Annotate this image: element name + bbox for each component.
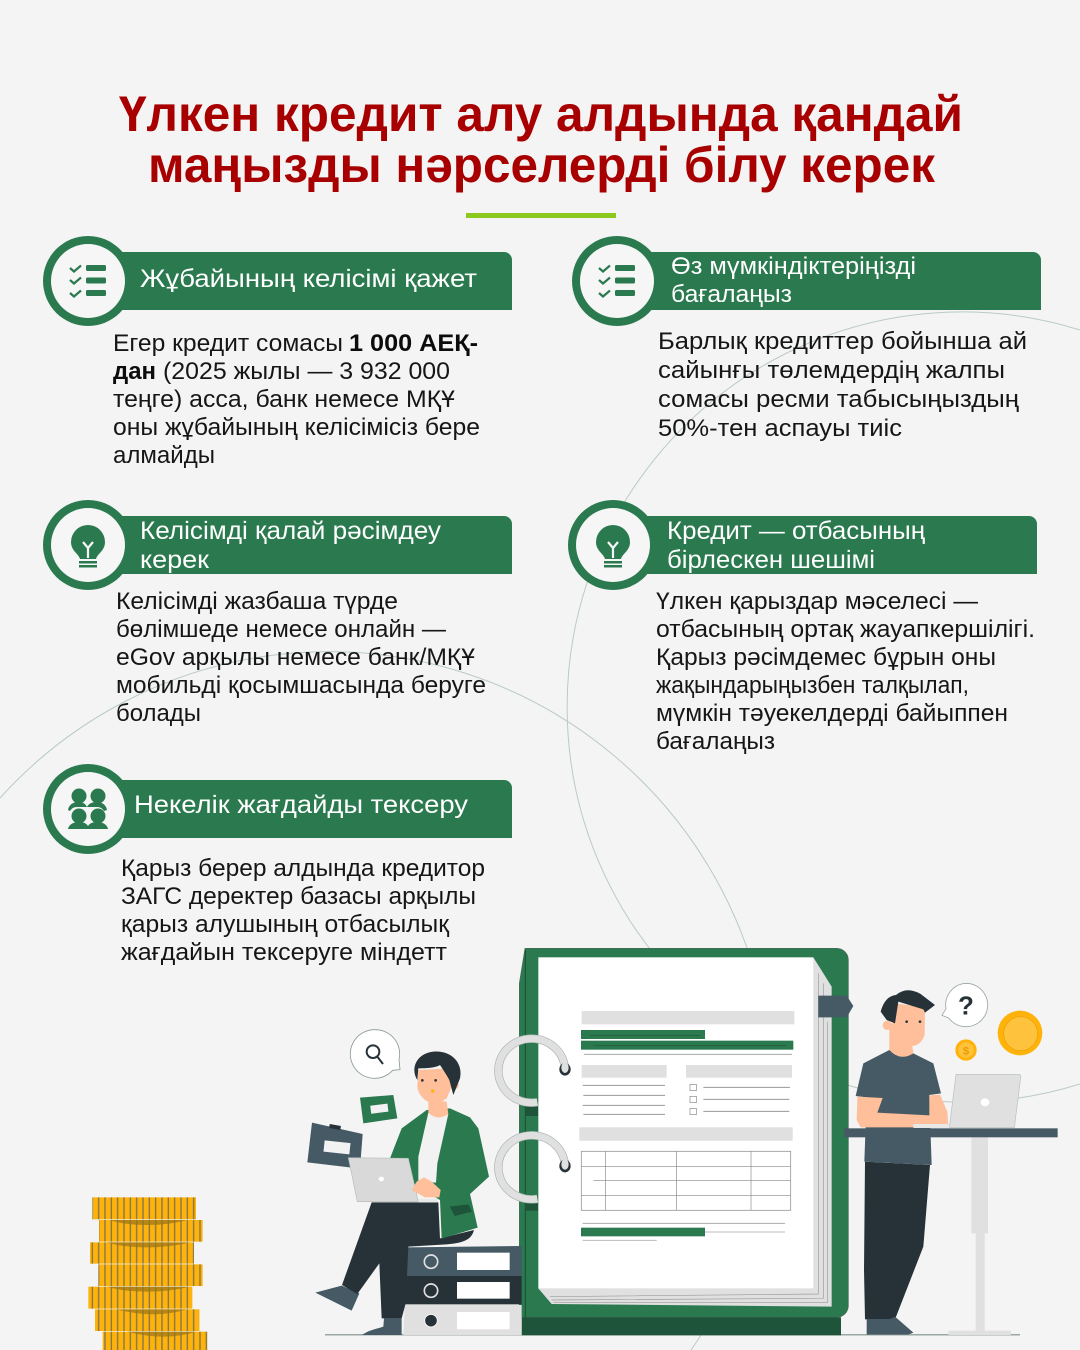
page stack [538,957,832,1307]
binders [403,1246,522,1335]
heading: Кредит — отбасының [667,517,925,545]
body text: Келісімді жазбаша түрде [116,588,398,615]
heading: керек [140,546,210,574]
question bubble: ? [958,990,974,1020]
body text: сомасы ресми табысыңыздың [658,386,1020,413]
body text: болады [116,700,201,727]
heading: Жұбайының келісімі қажет [140,265,478,293]
heading: Өз мүмкіндіктеріңізді [671,253,916,280]
icon: light bulb [43,500,133,590]
body text: eGov арқылы немесе банк/МҚҰ [116,644,476,671]
hand [412,1177,441,1197]
body text: сайынғы төлемдердің жалпы [658,357,1005,384]
illustration: coin stack [88,1197,207,1350]
illustration: binder document [519,948,853,1335]
spine base [522,1317,841,1335]
icon: checklist [43,236,133,326]
pocket [450,1204,472,1216]
body text: отбасының ортақ жауапкершілігі. [656,616,1035,643]
header bar [95,780,512,838]
green folder [360,1095,397,1123]
body text: дан [113,358,156,385]
body text: 1 000 АЕҚ- [349,330,478,357]
body text: жақындарыңызбен талқылап, [656,672,969,699]
body text: оны жұбайының келісімісіз бере [113,414,480,441]
laptop [913,1074,1021,1128]
icon: people [43,764,133,854]
heading: Некелік жағдайды тексеру [134,791,469,819]
header bar [624,252,1041,310]
body text: алмайды [113,442,215,469]
front page [538,957,813,1288]
body text: (2025 жылы — 3 932 000 [163,358,450,385]
cover [519,948,848,1317]
panel: family decision [568,500,1037,755]
heading [667,517,925,574]
body text: бағалаңыз [656,728,775,755]
title [119,86,963,193]
laptop [348,1158,437,1202]
head and neck [414,1052,461,1118]
illustration: binder rings [498,1039,571,1211]
heading [671,253,916,308]
panel: how to formalise consent [43,500,512,727]
shoes [867,1317,913,1335]
illustration: woman with laptop on binders [307,1030,522,1335]
header bar [95,252,512,310]
body text: Барлық кредиттер бойынша ай [658,328,1027,355]
body text: Үлкен қарыздар мәселесі — [656,588,978,615]
small coin [955,1039,977,1061]
header bar [95,516,512,574]
question bubble [942,983,988,1027]
trousers [864,1162,930,1319]
form content [579,1011,794,1240]
body text: 50%-тен аспауы тиіс [658,415,902,442]
body text [116,588,486,727]
speech bubble with magnifier [350,1030,400,1078]
panel: assess your capacity [572,236,1041,442]
body text: Қарыз берер алдында кредитор [121,855,485,882]
illustration: man at standing desk [844,983,1058,1335]
body text: Қарыз рәсімдемес бұрын оны [656,644,996,671]
icon: checklist [572,236,662,326]
header bar [620,516,1037,574]
title underline [466,213,616,218]
head [881,990,935,1057]
arms [857,1095,948,1127]
title: Үлкен кредит алу алдында қандай [119,86,963,142]
body text [658,328,1027,442]
dark folder [307,1123,363,1169]
body text: жағдайын тексеруге міндетт [121,939,447,966]
body text: теңге) асса, банк немесе МҚҰ [113,386,456,413]
heading: Келісімді қалай рәсімдеу [140,517,442,545]
large coin [998,1011,1042,1055]
panel: spouse consent [43,236,512,469]
title: маңызды нәрселерді білу керек [148,137,936,193]
body text: мүмкін тәуекелдерді байыппен [656,700,1008,727]
shirt [418,1113,448,1183]
shoes [315,1286,359,1311]
heading: бағалаңыз [671,281,792,308]
body text: ЗАГС деректер базасы арқылы [121,883,476,910]
panel: marital status check [43,764,512,966]
body text: мобильді қосымшасында беруге [116,672,486,699]
icon: light bulb [568,500,658,590]
trousers [342,1202,474,1318]
body text: Егер кредит сомасы [113,330,343,357]
jacket [390,1108,489,1239]
desk leg [948,1137,1011,1335]
body text [656,588,1035,755]
heading [140,517,442,574]
body text: қарыз алушының отбасылық [121,911,450,938]
small coin: $ [963,1045,970,1057]
body text: бөлімшеде немесе онлайн — [116,616,446,643]
ground line [325,1334,1020,1336]
heading: бірлескен шешімі [667,546,875,574]
body text [121,855,485,966]
body text [113,330,480,469]
t-shirt [856,1050,941,1165]
tab [818,996,853,1017]
desk top [844,1128,1058,1137]
